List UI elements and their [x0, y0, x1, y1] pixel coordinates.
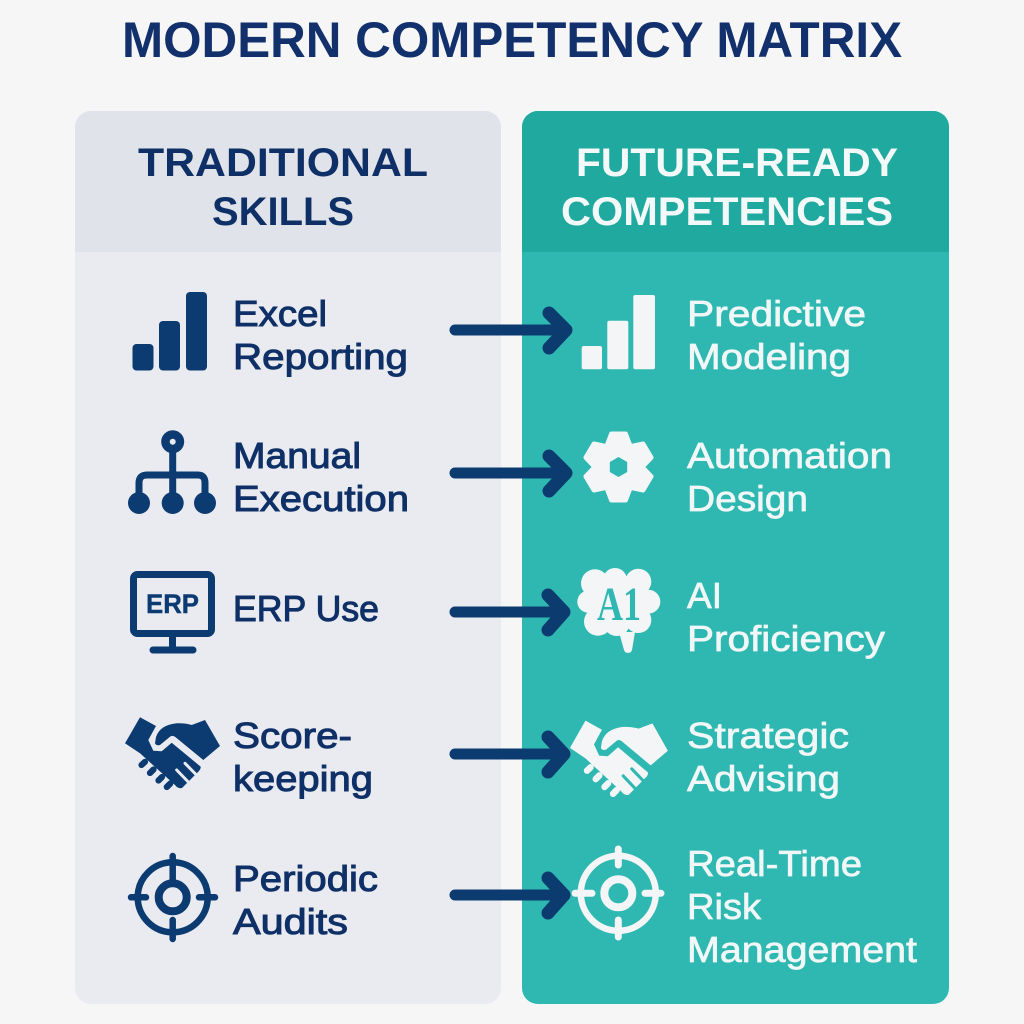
text: score-keeping: keeping — [233, 758, 373, 799]
text: score-keeping — [233, 715, 373, 799]
heading: future-ready competencies: FUTURE-READY — [576, 141, 898, 185]
text: strategic advising: Strategic — [687, 715, 849, 756]
panel: traditional skills — [75, 111, 501, 1004]
heading: traditional skills: TRADITIONAL — [138, 141, 428, 185]
icon: ai brain: A1 — [597, 578, 641, 631]
icon: erp monitor — [134, 574, 212, 650]
text: manual execution — [233, 435, 409, 519]
text: strategic advising — [687, 715, 849, 799]
text: ai proficiency: Proficiency — [687, 618, 885, 659]
text: automation design: Automation — [687, 435, 892, 476]
icon: bar chart — [132, 292, 207, 370]
icon: erp monitor: ERP — [146, 589, 199, 619]
icon: hierarchy — [128, 430, 216, 514]
arrow: score-keeping to strategic advising — [455, 737, 564, 772]
text: excel reporting — [233, 293, 408, 377]
icon: bar chart light — [582, 295, 655, 369]
heading: traditional skills — [138, 141, 428, 234]
text: periodic audits — [233, 858, 378, 942]
text: ai proficiency: AI — [687, 575, 722, 616]
text: predictive modeling: Predictive — [687, 293, 866, 334]
arrow: excel reporting to predictive modeling — [455, 313, 566, 348]
icon: handshake — [125, 717, 220, 788]
panel: future-ready competencies — [522, 111, 949, 1004]
text: strategic advising: Advising — [687, 758, 840, 799]
icon: target light — [575, 849, 661, 937]
text: periodic audits: Audits — [233, 901, 348, 942]
text: real-time risk management: Risk — [687, 886, 762, 927]
text: manual execution: Execution — [233, 478, 409, 519]
arrow: manual execution to automation design — [455, 456, 566, 491]
text: real-time risk management — [687, 843, 917, 970]
text: predictive modeling: Modeling — [687, 336, 851, 377]
heading: future-ready competencies: COMPETENCIES — [561, 190, 893, 234]
arrow: erp use to ai proficiency — [455, 595, 564, 630]
text: manual execution: Manual — [233, 435, 361, 476]
text: real-time risk management: Real-Time — [687, 843, 862, 884]
title: MODERN COMPETENCY MATRIX — [122, 12, 902, 68]
text: score-keeping: Score- — [233, 715, 352, 756]
text: predictive modeling — [687, 293, 866, 377]
text: excel reporting: Excel — [233, 293, 327, 334]
icon: target — [131, 856, 215, 939]
icon: ai brain — [577, 568, 660, 653]
icon: handshake light — [570, 721, 668, 795]
heading: future-ready competencies — [561, 141, 898, 234]
text: erp use: ERP Use — [233, 588, 379, 629]
text: ai proficiency — [687, 575, 885, 659]
text: real-time risk management: Management — [687, 929, 917, 970]
arrow: periodic audits to real-time risk management — [455, 878, 564, 913]
text: automation design — [687, 435, 892, 519]
icon: gear — [586, 434, 651, 500]
text: excel reporting: Reporting — [233, 336, 408, 377]
heading: traditional skills: SKILLS — [212, 190, 354, 234]
text: periodic audits: Periodic — [233, 858, 378, 899]
text: automation design: Design — [687, 478, 808, 519]
